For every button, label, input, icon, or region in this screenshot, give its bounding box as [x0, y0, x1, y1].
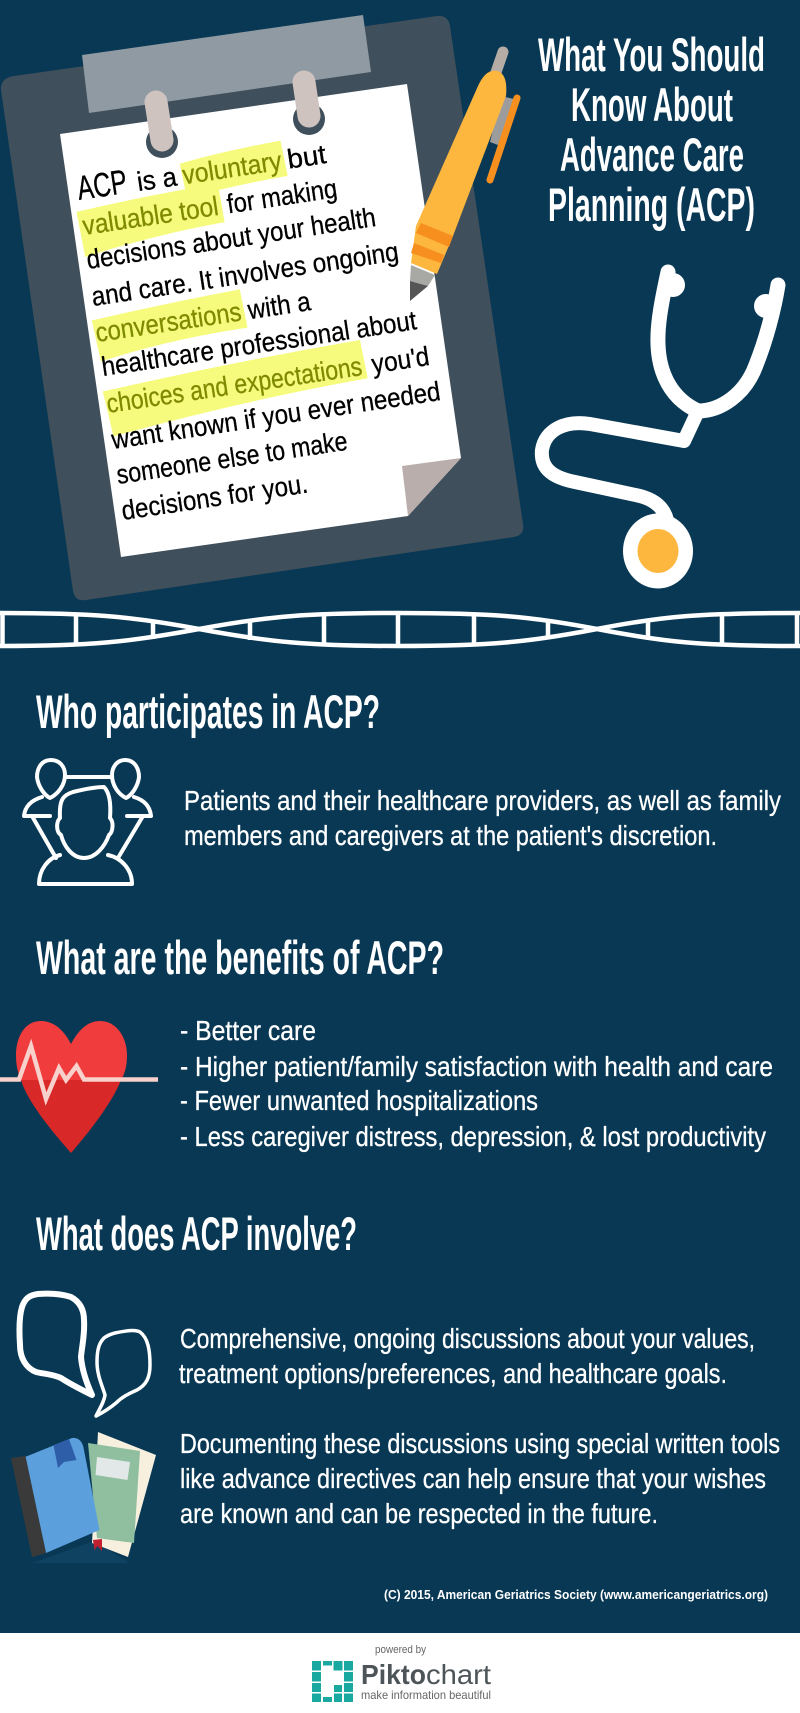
icon: speech bubbles	[19, 1294, 150, 1416]
note text line 5	[90, 279, 315, 362]
note text line 1	[75, 133, 330, 214]
note text line 7	[101, 330, 434, 437]
note text line 4: and care. It involves ongoing	[89, 236, 400, 312]
footer band	[0, 1633, 800, 1713]
note text line 6: healthcare professional about	[99, 305, 419, 382]
copyright note: (C) 2015, American Geriatrics Society (www.americangeriatrics.org)	[384, 1588, 768, 1602]
note text line 1: voluntary	[180, 146, 284, 190]
text: involve documenting: are known and can be respected in the future.	[180, 1498, 658, 1529]
note text line 2: for making	[225, 173, 339, 219]
note text line 5: conversations	[93, 297, 243, 348]
note text line 7: choices and expectations	[104, 351, 364, 419]
note text line 7: you'd	[370, 341, 431, 379]
note text line 1: is a	[135, 161, 180, 197]
text: benefits list: - Better care	[180, 1015, 316, 1046]
text: who participates	[184, 785, 781, 851]
note text line 2: valuable tool	[80, 191, 220, 241]
text: benefits list: - Fewer unwanted hospitalizations	[180, 1085, 538, 1116]
note text line 8: want known if you ever needed	[109, 376, 442, 455]
left binder ring	[146, 102, 178, 158]
Piktochart wordmark	[361, 1659, 491, 1690]
icon: heart with pulse line	[0, 1021, 158, 1153]
heading: involve: What does ACP involve?	[36, 1207, 357, 1260]
logo tagline: make information beautiful	[361, 1688, 491, 1702]
icon: people group	[24, 760, 151, 884]
clipboard illustration	[1, 15, 523, 600]
note text line 10: decisions for you.	[119, 468, 310, 526]
powered by label: powered by	[375, 1644, 426, 1656]
right binder ring	[293, 82, 325, 135]
DNA divider	[0, 613, 800, 646]
clipboard board	[1, 16, 523, 600]
icon: pen	[410, 52, 517, 301]
text: involve documenting	[180, 1428, 780, 1529]
heading: benefits: What are the benefits of ACP?	[36, 931, 444, 984]
note text line 5: with a	[245, 286, 313, 325]
Piktochart wordmark: chart	[426, 1659, 491, 1690]
text: who participates: members and caregivers at the patient's discretion.	[184, 820, 717, 851]
text: involve discussions	[179, 1323, 755, 1389]
clipboard clip	[82, 15, 371, 113]
heading: who participates: Who participates in ACP?	[36, 685, 380, 738]
title	[538, 28, 765, 231]
paper corner fold	[402, 458, 461, 516]
text: benefits list	[180, 1015, 773, 1152]
note text line 1: ACP	[75, 163, 130, 208]
note text line 2	[75, 166, 341, 257]
icon: stethoscope	[542, 272, 778, 588]
note text line 1: but	[285, 139, 329, 175]
icon: books	[11, 1432, 156, 1563]
note text line 3: decisions about your health	[84, 202, 378, 275]
paper sheet	[60, 84, 461, 557]
note text line 9: someone else to make	[114, 426, 349, 490]
Piktochart wordmark: Pikto	[361, 1659, 426, 1690]
Piktochart logo mark	[312, 1661, 353, 1702]
